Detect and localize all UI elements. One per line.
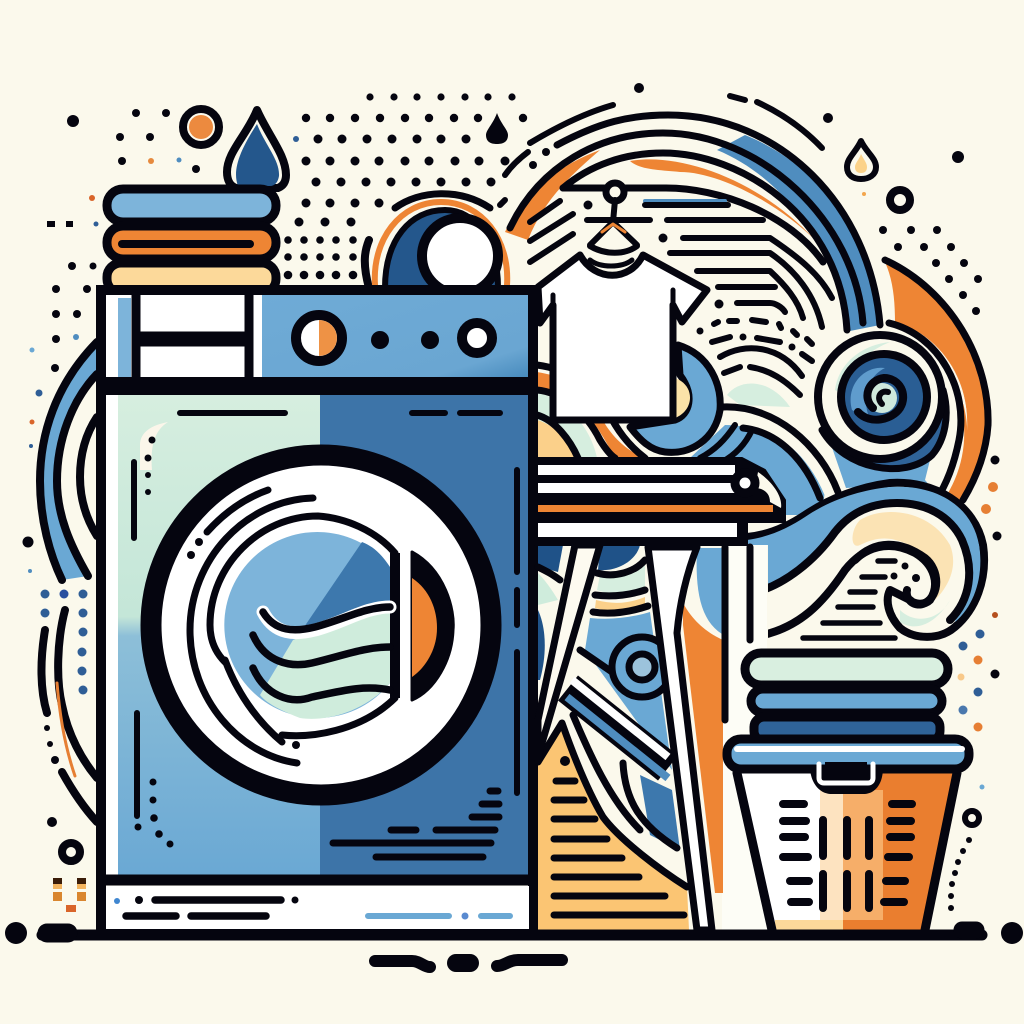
towel: blue: [107, 189, 276, 222]
icon: small water drop: [486, 113, 508, 144]
laundry basket: [727, 739, 969, 930]
table leg right: [648, 547, 712, 930]
under-table background: [538, 545, 768, 930]
icon: ring bottom right: [965, 811, 979, 825]
door: [151, 455, 491, 795]
swirl: blue region under spiral: [690, 323, 967, 515]
washing machine: [100, 290, 533, 934]
towel: light blue: [751, 689, 942, 713]
icon: dot field top centre: [284, 93, 527, 279]
body detail lines: [134, 413, 517, 816]
white column behind: [722, 545, 767, 930]
ironing table: [535, 458, 785, 545]
door half moon: [412, 552, 453, 700]
blue strip: [697, 548, 722, 634]
ground dashes: [375, 960, 562, 967]
orange strip: [683, 603, 723, 893]
hanger: [590, 183, 637, 266]
shirt body: [538, 255, 707, 420]
table post lines: [725, 547, 750, 720]
body highlight: [140, 422, 168, 470]
machine body right: [320, 395, 530, 877]
icon: dark ball with orange ring: [365, 194, 507, 294]
table legs and post: [538, 545, 767, 930]
machine outline: [101, 290, 533, 934]
icon: concentric circle under table: [612, 637, 672, 697]
swirl: large back arcs and orange crescent: [500, 96, 988, 503]
bottom strip: [100, 880, 533, 929]
stacked towels on machine: [107, 189, 276, 293]
icon: ring bottom left: [62, 843, 80, 861]
icon: large water drop: [227, 110, 286, 188]
swirl: right spiral: [818, 335, 942, 459]
towel: navy: [754, 717, 940, 741]
basket handle: [810, 762, 883, 794]
icon: orange ring top left: [183, 109, 219, 145]
t-shirt on hanger: [538, 183, 707, 420]
towel: orange: [107, 226, 276, 259]
white panels: [136, 292, 249, 380]
door arcs: [210, 516, 395, 662]
icon: dots top left: [22, 83, 644, 827]
icon: coloured speckles left: [28, 136, 299, 912]
table leg left: [538, 545, 600, 760]
swirl: ribbons under shirt: [537, 345, 720, 458]
icon: ring right: [890, 190, 910, 210]
waves: [253, 607, 390, 700]
door glass: [224, 532, 390, 718]
control panel: [261, 294, 529, 380]
swirl: left arcs behind machine: [40, 342, 97, 822]
towel: mint: [745, 653, 948, 685]
swirl: lower right wave: [747, 483, 984, 638]
basket rim: [727, 739, 969, 769]
knob: orange: [296, 315, 342, 361]
cream triangular cloth under table: [538, 715, 689, 930]
stacked towels on basket: [745, 653, 948, 741]
buttons: [371, 331, 439, 349]
ground line: [5, 922, 1023, 944]
towel: cream: [107, 263, 276, 293]
orange crescent: [885, 262, 985, 503]
basket slots: [783, 804, 912, 908]
knob: white: [462, 323, 492, 353]
icon: orange drop right: [847, 141, 876, 179]
icon: dots and speckles right: [823, 113, 1002, 911]
machine body left: [118, 395, 322, 877]
